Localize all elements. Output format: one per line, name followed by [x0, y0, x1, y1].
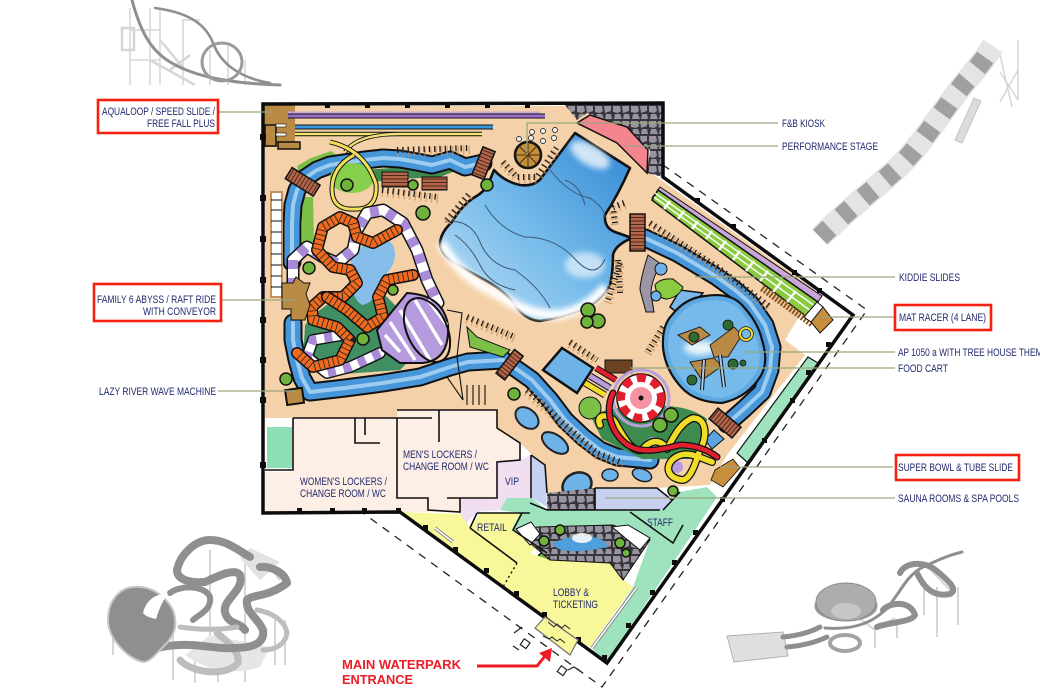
label: main waterpark entrance: [342, 657, 462, 687]
room labels: TICKETING: [553, 599, 598, 611]
green room strip west: [267, 427, 292, 468]
changing kiosks: [382, 172, 447, 190]
leader lines: [218, 112, 895, 498]
background slide: super bowl 3D model: [727, 552, 962, 662]
landscaping trees: [280, 179, 678, 577]
sun loungers: [382, 147, 770, 465]
family raft ride: [293, 210, 459, 375]
room labels: VIP: [505, 476, 519, 488]
kiddie slides lanes: [652, 187, 822, 317]
outer dashed site boundary: [363, 165, 867, 687]
room labels: LOBBY &: [553, 587, 590, 599]
callout: family 6 abyss: WITH CONVEYOR: [143, 306, 216, 318]
room labels: CHANGE ROOM / WC: [403, 461, 489, 473]
background slide: aqualoop 3D model: [122, 0, 280, 85]
kiddie rock play area: [640, 255, 683, 312]
label: main waterpark entrance: MAIN WATERPARK: [342, 657, 462, 672]
callout: mat racer: [895, 305, 991, 330]
site plan: [260, 103, 867, 687]
F&B kiosk umbrella seating: [515, 128, 558, 168]
room labels: [300, 449, 673, 611]
rectangular activity pool: [543, 348, 593, 393]
white service area by mat racer: [787, 293, 853, 360]
label: food cart: FOOD CART: [898, 363, 948, 375]
cabanas west wall: [271, 192, 282, 297]
label: performance stage: PERFORMANCE STAGE: [782, 141, 878, 153]
mat racer tower: [762, 288, 833, 333]
callout: family 6 abyss: FAMILY 6 ABYSS / RAFT RIDE: [97, 294, 216, 306]
room labels: CHANGE ROOM / WC: [300, 488, 386, 500]
room labels: WOMEN'S LOCKERS /: [300, 476, 388, 488]
callout: super bowl: [896, 455, 1019, 480]
label: kiddie slides: KIDDIE SLIDES: [899, 272, 960, 284]
VIP room: [460, 455, 531, 523]
wave machine building: [285, 388, 304, 405]
service wedge walls: [447, 310, 485, 405]
label: F&B kiosk: F&B KIOSK: [782, 118, 825, 130]
arrow: to entrance: [477, 648, 552, 666]
building outer wall: [263, 103, 853, 663]
rocks behind stage: [565, 103, 663, 177]
main entrance vestibule: [513, 617, 580, 676]
sauna rooms: [532, 455, 672, 510]
rock feature with fountain pool: [516, 522, 650, 580]
callout: aqualoop: [98, 100, 218, 133]
staff corridors: [500, 487, 717, 662]
rock garden by spa pool: [547, 488, 595, 510]
callout: aqualoop: AQUALOOP / SPEED SLIDE /: [102, 106, 216, 118]
lazy river: [292, 158, 772, 460]
wave pool: [440, 133, 632, 321]
room labels: STAFF: [647, 517, 673, 529]
raft ride platform: [282, 277, 310, 320]
small plunge pools: [511, 403, 653, 502]
performance stage: [577, 115, 648, 173]
label: main waterpark entrance: ENTRANCE: [342, 672, 413, 687]
callout: family 6 abyss: [94, 284, 221, 321]
lobby and retail: [400, 512, 633, 655]
aqualoop and speed slide lanes: [288, 113, 545, 209]
super bowl and tube slide: [579, 368, 740, 487]
background slide: family abyss 3D model: [108, 540, 287, 683]
kiddie activity pool with tree house: [663, 290, 765, 403]
food cart: [605, 360, 632, 373]
abyss funnel: [377, 291, 459, 369]
green service strip: [737, 357, 818, 463]
women's and men's locker rooms: [265, 410, 520, 512]
floor plan walls: [265, 410, 683, 648]
room labels: RETAIL: [477, 522, 507, 534]
structural columns: [260, 104, 831, 660]
floor: tan deck: [265, 106, 815, 493]
label: lazy river wave machine: LAZY RIVER WAVE MACHINE: [99, 386, 216, 398]
planting behind river: [297, 151, 470, 249]
room labels: MEN'S LOCKERS /: [403, 449, 478, 461]
top slide tower: [264, 105, 300, 149]
background slide: mat racer 3D model: [820, 40, 1018, 237]
callout: aqualoop: FREE FALL PLUS: [147, 118, 215, 130]
callout: mat racer: MAT RACER (4 LANE): [899, 312, 986, 324]
river bridges: [285, 147, 741, 438]
